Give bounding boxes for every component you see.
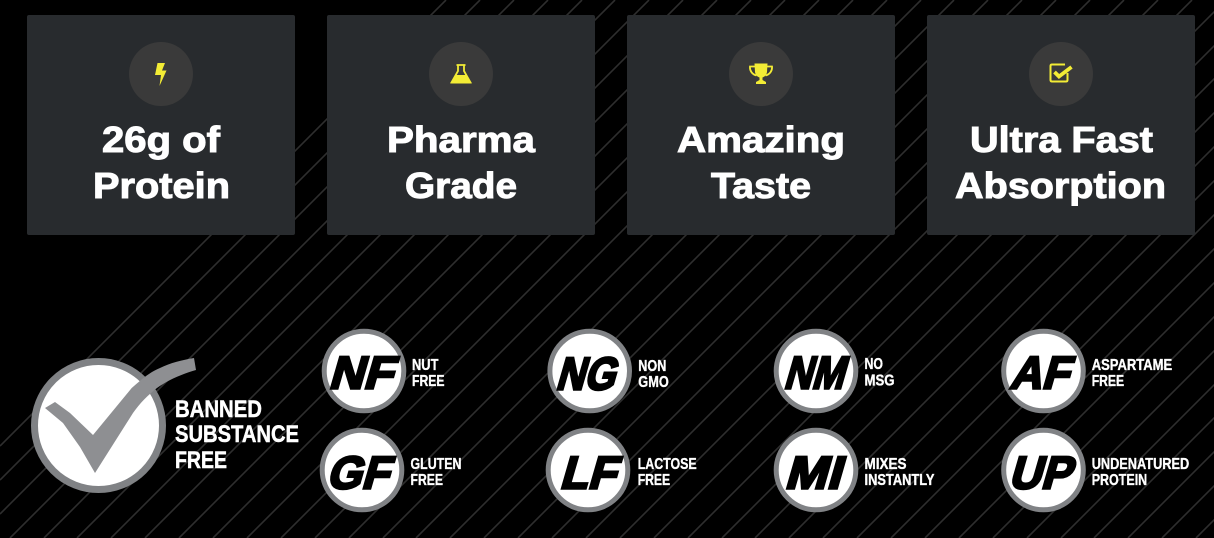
icon: trophy bbox=[750, 64, 772, 84]
label: banned substance free: FREE bbox=[175, 447, 227, 474]
heading: Ultra Fast Absorption: Absorption bbox=[955, 165, 1166, 206]
badge: lactose free bbox=[548, 430, 697, 510]
badge: undenatured protein: PROTEIN bbox=[1092, 472, 1147, 489]
badge: no msg: NM bbox=[780, 347, 855, 398]
badge: lactose free: LACTOSE bbox=[638, 456, 697, 473]
badge: non gmo: NON bbox=[638, 358, 666, 375]
badge: nut free: FREE bbox=[412, 373, 444, 390]
badge: gluten free: GF bbox=[323, 447, 400, 498]
badge: undenatured protein: UP bbox=[1005, 447, 1082, 498]
heading: 26g of Protein: 26g of bbox=[102, 119, 221, 160]
badge: aspartame free: ASPARTAME bbox=[1092, 357, 1172, 374]
label: banned substance free: SUBSTANCE bbox=[175, 421, 299, 448]
badge: aspartame free: FREE bbox=[1092, 373, 1124, 390]
badge: aspartame free: AF bbox=[1006, 347, 1080, 398]
badge: nut free: NUT bbox=[412, 357, 439, 374]
badge: non gmo bbox=[550, 331, 669, 411]
heading: Amazing Taste bbox=[677, 119, 845, 206]
heading: Amazing Taste: Amazing bbox=[677, 119, 845, 160]
badge: aspartame free bbox=[1004, 331, 1172, 411]
panel: ultra fast absorption bbox=[927, 15, 1195, 235]
heading: Ultra Fast Absorption bbox=[955, 119, 1166, 206]
panel: amazing taste bbox=[627, 15, 895, 235]
icon: lightning bolt bbox=[155, 63, 166, 86]
badge: lactose free: FREE bbox=[638, 472, 670, 489]
badge: undenatured protein bbox=[1004, 430, 1189, 510]
badge: mixes instantly: MI bbox=[781, 447, 852, 498]
badge: banned substance free bbox=[34, 358, 299, 490]
icon: large check mark bbox=[45, 358, 196, 473]
badge: gluten free: GLUTEN bbox=[410, 456, 462, 473]
badge: non gmo: GMO bbox=[638, 374, 669, 391]
panel: 26g of protein bbox=[27, 15, 295, 235]
panel: pharma grade bbox=[327, 15, 595, 235]
badge: nut free: NF bbox=[325, 347, 404, 398]
heading: 26g of Protein bbox=[93, 119, 230, 206]
badge: lactose free: LF bbox=[556, 447, 627, 498]
heading: Pharma Grade: Pharma bbox=[387, 119, 536, 160]
badge: no msg: NO bbox=[864, 356, 883, 373]
badge: no msg: MSG bbox=[864, 372, 894, 390]
badge: non gmo: NG bbox=[552, 348, 626, 399]
badge: mixes instantly: INSTANTLY bbox=[864, 472, 935, 489]
heading: Ultra Fast Absorption: Ultra Fast bbox=[970, 119, 1153, 160]
badge: nut free bbox=[324, 331, 444, 411]
badge: mixes instantly: MIXES bbox=[864, 456, 906, 473]
heading: Pharma Grade bbox=[387, 119, 536, 206]
icon: flask bbox=[451, 65, 471, 84]
badge: mixes instantly bbox=[776, 430, 935, 510]
badge: undenatured protein: UNDENATURED bbox=[1092, 456, 1189, 473]
badge: gluten free: FREE bbox=[410, 472, 443, 489]
heading: Amazing Taste: Taste bbox=[711, 165, 811, 206]
label: banned substance free: BANNED bbox=[175, 396, 262, 423]
label: banned substance free bbox=[175, 396, 299, 474]
heading: Pharma Grade: Grade bbox=[405, 165, 517, 206]
badge: no msg bbox=[776, 331, 894, 411]
icon: checkbox bbox=[1050, 64, 1072, 82]
heading: 26g of Protein: Protein bbox=[93, 165, 230, 206]
badge: gluten free bbox=[322, 430, 462, 510]
